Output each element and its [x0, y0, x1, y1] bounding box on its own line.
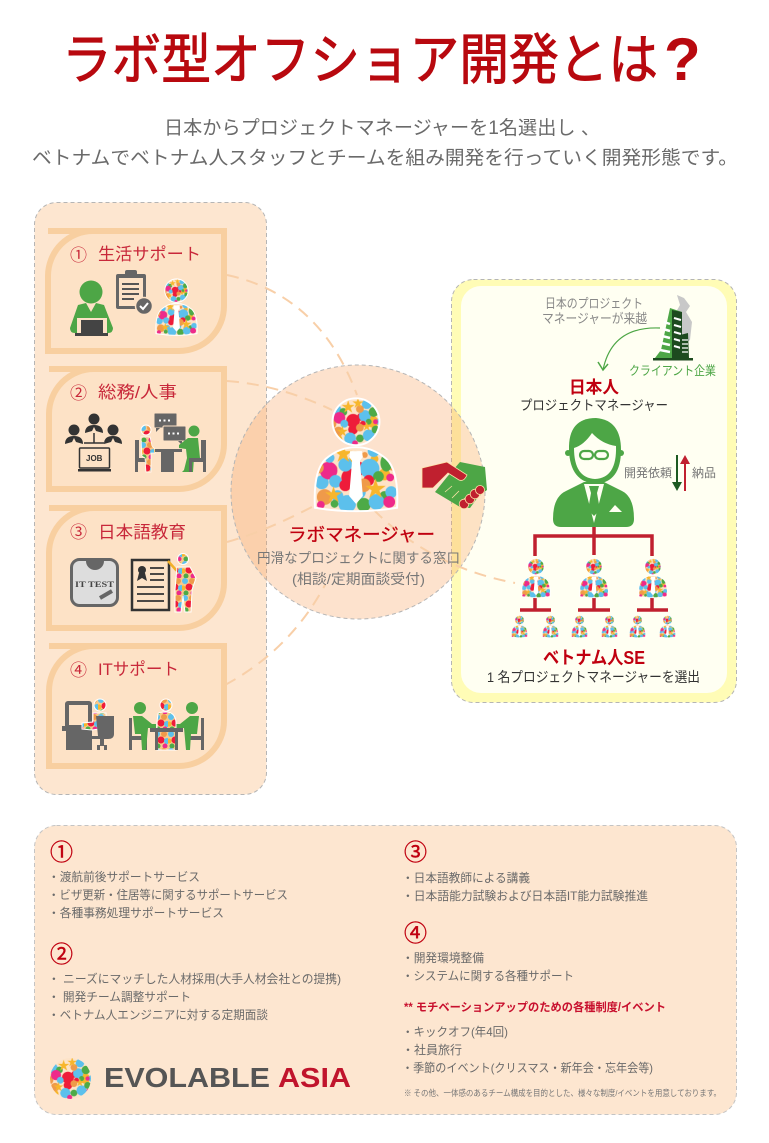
card 1: life support: 生活サポート	[98, 245, 201, 264]
icon: lab manager	[156, 279, 197, 335]
logo: EVOLABLE	[104, 1062, 270, 1093]
japanese PM heading: 日本人	[569, 378, 619, 397]
vietnamese SE heading	[487, 648, 700, 685]
request and delivery labels	[624, 465, 716, 480]
detail 1: ・渡航前後サポートサービス	[48, 869, 200, 884]
arrows: request and delivery	[672, 455, 690, 491]
motivation events	[402, 1000, 721, 1098]
motivation events: ** モチベーションアップのための各種制度/イベント	[404, 1000, 666, 1014]
card 4: IT support	[49, 646, 224, 766]
subtitle	[32, 117, 738, 169]
lab manager description	[257, 550, 460, 587]
card 1: life support	[48, 231, 224, 351]
vietnamese SE heading: ベトナム人SE	[543, 648, 645, 668]
client label: クライアント企業	[629, 363, 716, 378]
request and delivery labels: 納品	[692, 465, 716, 480]
vietnamese SE heading: 1 名プロジェクトマネージャーを選出	[487, 669, 700, 685]
detail 3: ③	[404, 839, 427, 865]
japanese PM heading: プロジェクトマネージャー	[520, 398, 668, 413]
card 1: life support: ①	[70, 246, 87, 265]
card 4: IT support: ITサポート	[98, 660, 179, 679]
icon: japan map and buildings	[653, 295, 693, 360]
detail 2: ・ ニーズにマッチした人材採用(大手人材会社との提携)	[48, 971, 341, 986]
vietnamese SE team	[511, 558, 676, 638]
motivation events: ・キックオフ(年4回)	[402, 1025, 508, 1039]
lab manager description: (相談/定期面談受付)	[292, 571, 425, 587]
card 4: IT support: ④	[70, 661, 87, 680]
detail 1: ・ビザ更新・住居等に関するサポートサービス	[48, 888, 288, 902]
detail 1: ・各種事務処理サポートサービス	[48, 905, 224, 920]
detail 4	[402, 920, 574, 983]
detail 1: ①	[50, 839, 73, 865]
icon: IT test: IT TEST	[75, 580, 115, 589]
detail 2	[48, 941, 341, 1022]
detail 1	[48, 839, 288, 920]
icon: IT test	[72, 560, 118, 606]
detail 2: ②	[50, 941, 73, 967]
request and delivery labels: 開発依頼	[624, 466, 672, 480]
card 3: japanese education: ③	[70, 523, 87, 542]
icon: engineer at desk	[62, 699, 114, 750]
card 2: general affairs: 総務/人事	[98, 383, 177, 402]
logo	[50, 1058, 351, 1099]
title: ?	[664, 26, 701, 93]
japanese PM heading	[520, 378, 668, 413]
icon: recruiting: JOB	[86, 454, 103, 463]
org chart lines	[520, 527, 668, 610]
icon: clipboard with check	[116, 270, 152, 314]
card 2: general affairs	[49, 369, 224, 489]
icon: handshake	[422, 462, 487, 509]
subtitle: ベトナムでベトナム人スタッフとチームを組み開発を行っていく開発形態です。	[32, 147, 738, 169]
title: ラボ型オフショア開発とは	[62, 29, 658, 91]
detail 3: ・日本語能力試験および日本語IT能力試験推進	[402, 888, 648, 903]
arrow: client to project manager	[598, 328, 660, 370]
lab manager label: ラボマネージャー	[288, 525, 435, 545]
panel: lab manager circle	[231, 365, 485, 619]
client note: マネージャーが来越	[542, 311, 647, 326]
motivation events: ・季節のイベント(クリスマス・新年会・忘年会等)	[402, 1061, 653, 1075]
icon: team meeting	[129, 699, 204, 750]
logo: ASIA	[278, 1062, 351, 1093]
motivation events: ・社員旅行	[402, 1042, 462, 1057]
connectors	[225, 275, 515, 685]
detail 3	[402, 839, 648, 903]
detail 2: ・ 開発チーム調整サポート	[48, 990, 191, 1004]
card 3: japanese education	[49, 508, 224, 628]
lab manager figure	[315, 398, 397, 511]
motivation events: ※ その他、一体感のあるチーム構成を目的とした、様々な制度/イベントを用意しております。	[404, 1088, 721, 1098]
client note: 日本のプロジェクト	[545, 296, 643, 311]
panel: support services	[34, 202, 266, 794]
detail 3: ・日本語教師による講義	[402, 870, 530, 885]
subtitle: 日本からプロジェクトマネージャーを1名選出し 、	[164, 117, 600, 139]
icon: recruiting	[65, 414, 122, 472]
detail 4: ・システムに関する各種サポート	[402, 968, 574, 983]
icon: interview	[135, 413, 206, 472]
panel: details	[34, 826, 736, 1114]
card 3: japanese education: 日本語教育	[98, 523, 186, 542]
detail 2: ・ベトナム人エンジニアに対する定期面談	[48, 1008, 268, 1022]
detail 4: ・開発環境整備	[402, 951, 484, 965]
client note	[542, 296, 647, 326]
card 2: general affairs: ②	[70, 384, 87, 403]
panel: vietnam team	[452, 280, 736, 702]
lab manager description: 円滑なプロジェクトに関する窓口	[257, 550, 460, 566]
icon: japanese project manager	[553, 418, 634, 527]
detail 4: ④	[404, 920, 427, 946]
icon: certificate with presenter	[132, 554, 196, 612]
icon: green person with laptop	[70, 280, 113, 336]
